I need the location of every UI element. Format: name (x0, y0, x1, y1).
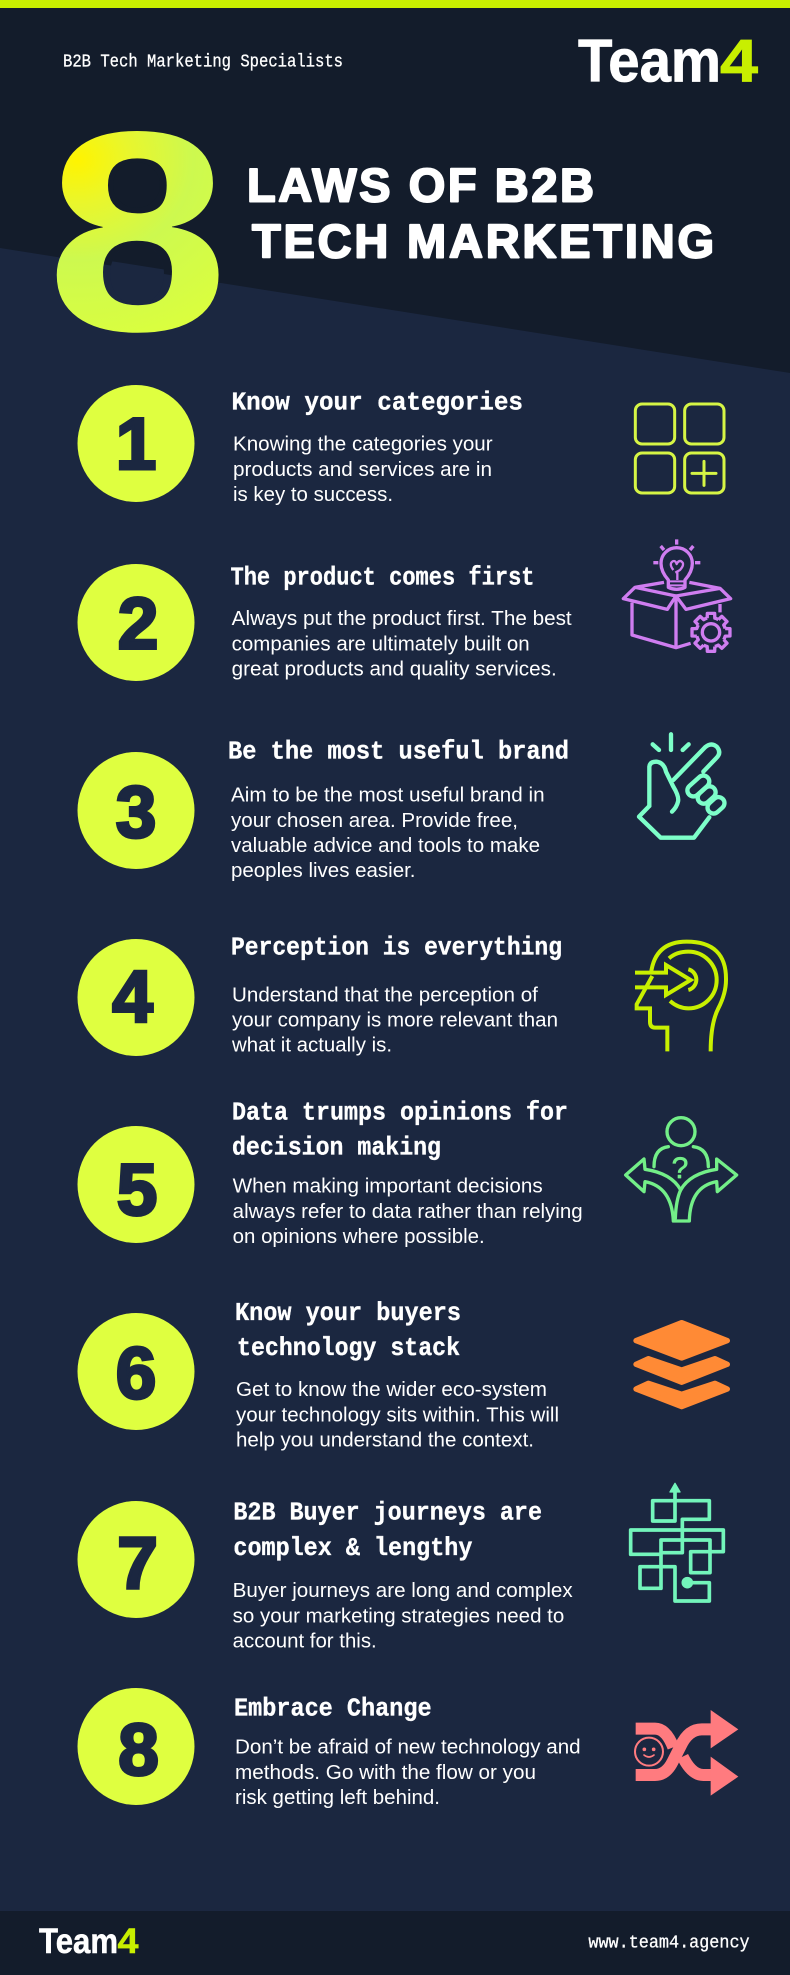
footer logo: Team (39, 1922, 118, 1961)
body text 2 (232, 608, 572, 681)
number badge 2: 2 (118, 584, 158, 664)
number badge 6: 6 (116, 1334, 156, 1414)
number badge 7 (78, 1501, 194, 1618)
body text 6: Get to know the wider eco-system (236, 1379, 547, 1401)
number badge 2 (78, 564, 194, 681)
body text 1: is key to success. (233, 484, 393, 506)
panel: law 5 (78, 1097, 737, 1248)
icon: category grid (635, 404, 724, 493)
body text 3 (231, 785, 545, 882)
body text 1: Knowing the categories your (233, 434, 493, 456)
body text 7: so your marketing strategies need to (233, 1605, 564, 1627)
body text 6 (236, 1379, 559, 1452)
title (247, 158, 714, 268)
body text 3: valuable advice and tools to make (231, 835, 540, 857)
body text 6: your technology sits within. This will (236, 1405, 559, 1427)
number badge 4: 4 (112, 957, 153, 1038)
heading 3: Be the most useful brand (228, 736, 569, 766)
heading 6: Know your buyers (235, 1298, 461, 1328)
body text 4: what it actually is. (231, 1035, 392, 1057)
icon: box with light bulb and gear (623, 539, 731, 651)
body text 3: Aim to be the most useful brand in (231, 785, 545, 807)
title: LAWS OF B2B (247, 158, 594, 212)
panel: law 7 (78, 1483, 723, 1652)
number badge 3 (78, 752, 194, 869)
number badge 6 (78, 1313, 194, 1430)
panel: law 4 (78, 933, 726, 1057)
heading 8: Embrace Change (234, 1694, 432, 1724)
icon: person at decision crossroads (626, 1118, 737, 1221)
body text 8: methods. Go with the flow or you (235, 1762, 536, 1784)
body text 7: account for this. (233, 1630, 377, 1652)
number badge 7: 7 (117, 1523, 158, 1604)
body text 8: Don’t be afraid of new technology and (235, 1736, 581, 1758)
body text 1 (233, 434, 493, 506)
heading 5 (232, 1097, 568, 1163)
icon: person at decision crossroads: ? (672, 1152, 688, 1185)
icon: shuffle arrows with smiley (633, 1710, 738, 1796)
body text 4: your company is more relevant than (232, 1010, 558, 1032)
body text 3: your chosen area. Provide free, (231, 810, 518, 832)
body text 5: on opinions where possible. (233, 1226, 485, 1248)
heading 5: decision making (232, 1133, 441, 1163)
title: TECH MARKETING (252, 214, 714, 268)
icon: maze pathway with arrow (631, 1483, 723, 1601)
icon: head with target arrow (635, 942, 726, 1051)
body text 8: risk getting left behind. (235, 1787, 440, 1809)
heading 6: technology stack (237, 1333, 460, 1363)
number badge 3: 3 (116, 772, 156, 853)
tagline: B2B Tech Marketing Specialists (63, 52, 343, 72)
body text 6: help you understand the context. (236, 1430, 534, 1452)
body text 3: peoples lives easier. (231, 860, 416, 882)
body text 7: Buyer journeys are long and complex (233, 1580, 573, 1602)
body text 5: always refer to data rather than relying (233, 1201, 583, 1223)
body text 4 (231, 984, 558, 1057)
number badge 8 (78, 1688, 194, 1805)
heading 5: Data trumps opinions for (232, 1097, 568, 1127)
heading 7 (233, 1498, 542, 1563)
body text 5 (233, 1176, 583, 1248)
logo: Team4: 4 (720, 28, 759, 94)
footer bar (0, 1911, 790, 1975)
heading 6 (235, 1298, 461, 1363)
panel: law 8 (78, 1688, 738, 1809)
footer website address: www.team4.agency (588, 1934, 750, 1954)
number badge 1 (78, 385, 194, 502)
top accent bar (0, 0, 790, 8)
number badge 4 (78, 939, 194, 1056)
big number 8 (56, 131, 219, 333)
logo: Team4: Team (578, 28, 721, 94)
big number 8: 8 (46, 73, 229, 391)
body text 1: products and services are in (233, 459, 492, 481)
body text 8 (235, 1736, 581, 1809)
header dark background (0, 0, 790, 373)
body text 5: When making important decisions (233, 1176, 543, 1198)
heading 4: Perception is everything (231, 933, 562, 963)
body text 7 (233, 1580, 573, 1652)
number badge 5 (78, 1126, 194, 1243)
panel: law 3 (78, 734, 727, 882)
icon: finger snap hand (639, 734, 727, 838)
footer logo: 4 (118, 1922, 139, 1961)
heading 7: B2B Buyer journeys are (233, 1498, 542, 1528)
number badge 8: 8 (118, 1710, 159, 1791)
body text 2: companies are ultimately built on (232, 634, 530, 656)
icon: orange layers (636, 1323, 727, 1407)
body text 2: great products and quality services. (232, 659, 557, 681)
body text 2: Always put the product first. The best (232, 608, 572, 630)
number badge 1: 1 (116, 404, 156, 485)
panel: law 2 (78, 539, 731, 681)
panel: law 1 (78, 385, 724, 506)
heading 7: complex & lengthy (233, 1533, 473, 1563)
panel: law 6 (78, 1298, 727, 1452)
number badge 5: 5 (117, 1150, 157, 1231)
body text 4: Understand that the perception of (232, 984, 538, 1006)
heading 2: The product comes first (230, 562, 534, 592)
heading 1: Know your categories (232, 388, 523, 418)
